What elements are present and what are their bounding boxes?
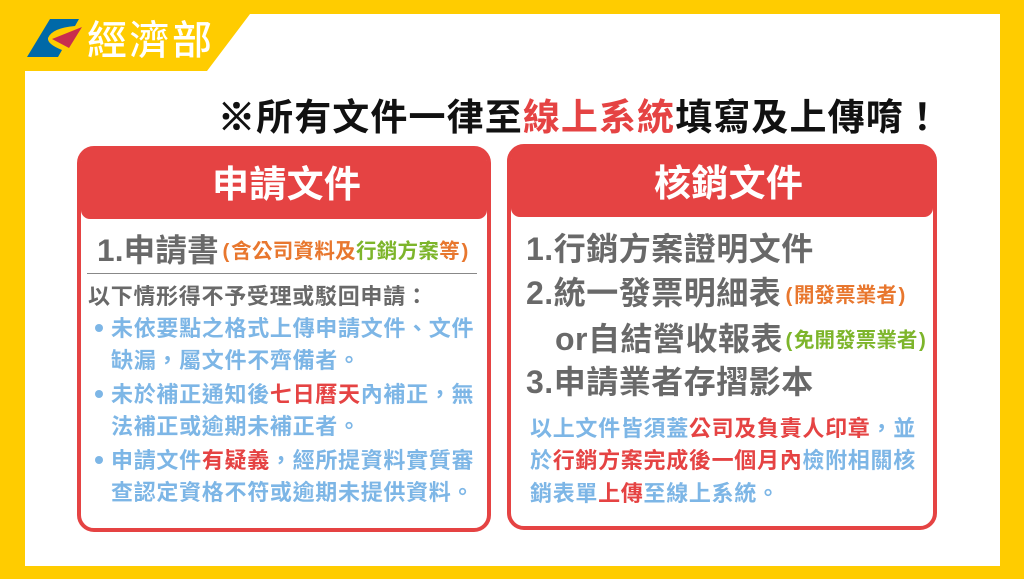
panel outline: [77, 146, 491, 532]
bullet 2 line 1: 未於補正通知後七日曆天內補正，無: [111, 382, 474, 407]
panel outline: [507, 144, 937, 530]
bullet marker 3: [95, 456, 103, 464]
note line 1: 以上文件皆須蓋公司及負責人印章，並: [530, 416, 916, 441]
icon: ministry logo: [27, 19, 82, 57]
rejection conditions heading: 以下情形得不予受理或駁回申請：: [88, 284, 429, 309]
bullet 1 line 2: 缺漏，屬文件不齊備者。: [111, 348, 361, 373]
logo wordmark: 經濟部: [87, 19, 214, 63]
bullet 2 line 2: 法補正或逾期未補正者。: [111, 414, 361, 439]
document item 3: 3.申請業者存摺影本: [526, 364, 814, 400]
note line 2: 於行銷方案完成後一個月內檢附相關核: [530, 448, 916, 473]
bullet 1 line 1: 未依要點之格式上傳申請文件、文件: [111, 316, 474, 341]
document item 1: 1.行銷方案證明文件: [526, 231, 814, 267]
bullet marker 1: [95, 324, 103, 332]
document item 2: 2.統一發票明細表: [526, 275, 781, 311]
panel header: [81, 148, 487, 219]
panel heading: 核銷文件: [654, 163, 803, 204]
panel: write-off documents: [507, 144, 937, 530]
bullet 3 line 2: 查認定資格不符或逾期未提供資料。: [111, 480, 474, 505]
panel heading: 申請文件: [212, 164, 361, 205]
bullet list of rejection conditions: [95, 316, 474, 505]
title: ※所有文件一律至線上系統填寫及上傳唷！: [218, 87, 942, 141]
document item 2 note: (開發票業者): [786, 284, 905, 307]
panel header: [511, 146, 933, 217]
document note: (含公司資料及行銷方案等): [222, 240, 469, 263]
divider rule: [87, 273, 477, 274]
bullet marker 2: [95, 390, 103, 398]
document item: 1.申請書: [97, 232, 219, 268]
bullet 3 line 1: 申請文件有疑義，經所提資料實質審: [111, 448, 474, 473]
document item 2 alternative note: (免開發票業者): [786, 329, 926, 352]
note line 3: 銷表單上傳至線上系統。: [530, 481, 780, 506]
stamp and upload note: [530, 416, 916, 506]
panel: application documents: [77, 146, 491, 532]
document item 2 alternative: or自結營收報表: [555, 321, 783, 357]
